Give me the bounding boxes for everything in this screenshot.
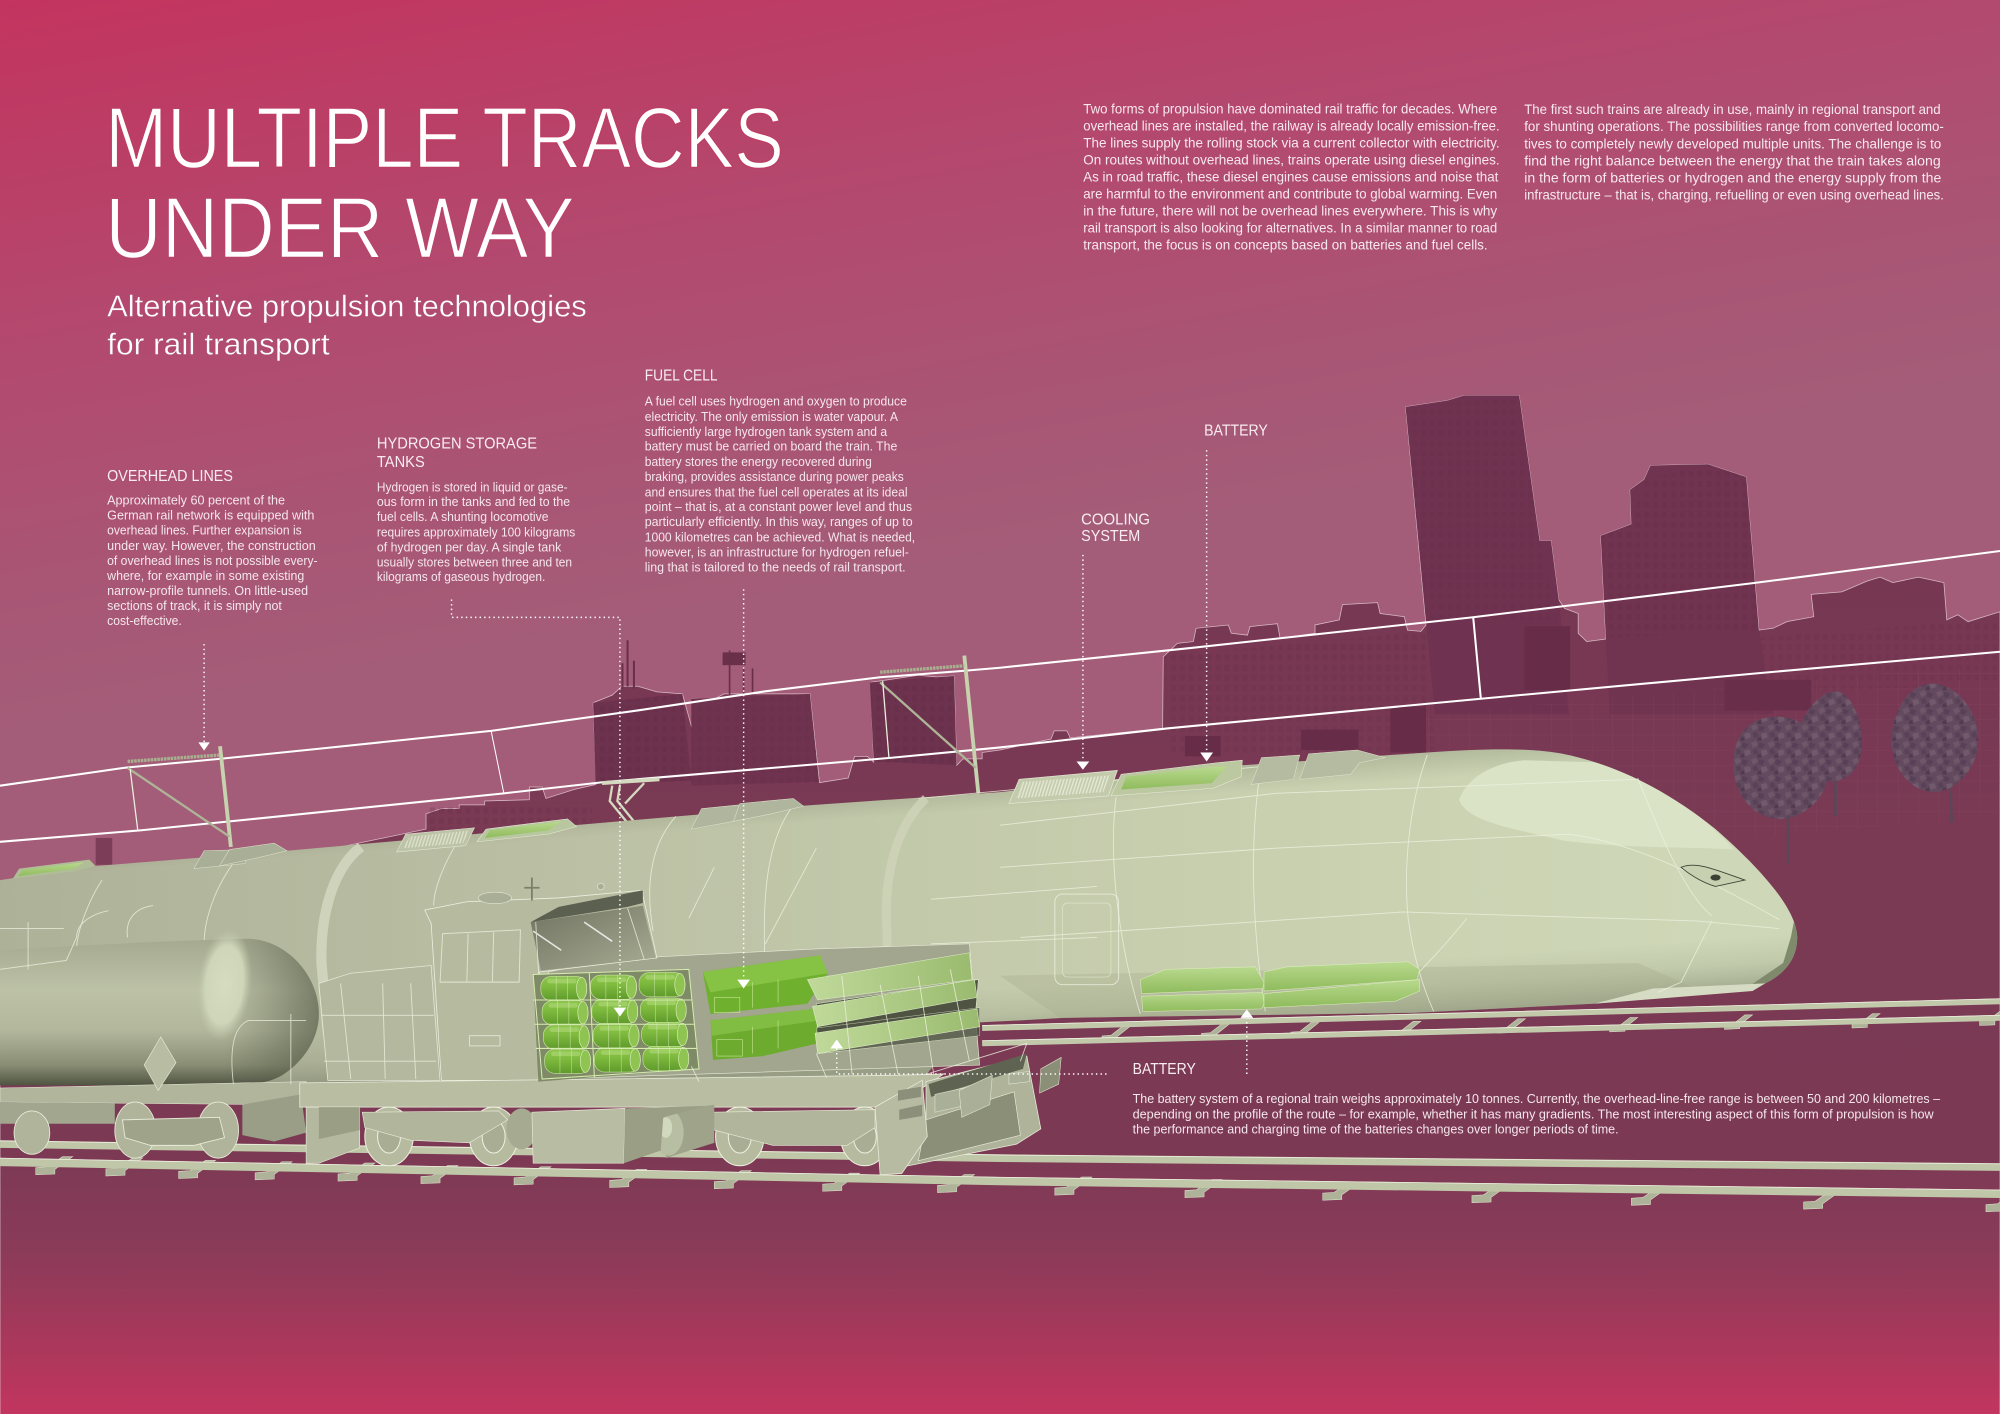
locomotive [300, 878, 1061, 1175]
fuel cell [703, 955, 828, 1060]
panel: battery: depending on the profile of the route – for example, whether it has many gradients. The most interesting aspect of this form of propulsion is how [1133, 1107, 1934, 1122]
panel: fuel cell: particularly efficiently. In this way, ranges of up to [645, 514, 913, 529]
tower windows [426, 395, 2000, 842]
roof: battery front [1111, 760, 1242, 796]
locomotive front railing [691, 969, 1027, 1082]
rooftop antennas [622, 640, 753, 695]
intro text column 1: are harmful to the environment and contribute to global warming. Even [1083, 186, 1497, 202]
roof: third unit [13, 843, 287, 879]
lower track [0, 1141, 2000, 1212]
title: MULTIPLE TRACKS [105, 90, 784, 187]
label: cooling system [1081, 511, 1150, 545]
intro text column 2: in the form of batteries or hydrogen and the energy supply from the [1524, 170, 1941, 186]
label: cooling system: COOLING [1081, 511, 1150, 529]
panel: fuel cell: battery must be carried on board the train. The [645, 439, 897, 454]
intro text column 1: On routes without overhead lines, trains operate using diesel engines. [1083, 152, 1500, 168]
panel: overhead lines: overhead lines. Further expansion is [107, 523, 302, 538]
trees [1733, 684, 1978, 864]
pantograph [602, 779, 659, 821]
central box [532, 1108, 625, 1163]
roof fittings [478, 878, 604, 904]
catenary mast right [880, 656, 978, 793]
panel: fuel cell: electricity. The only emission is water vapour. A [645, 409, 898, 424]
panel: fuel cell: A fuel cell uses hydrogen and oxygen to produce [645, 394, 907, 409]
panel: overhead lines: under way. However, the construction [107, 538, 316, 553]
engine hood behind equipment [548, 944, 980, 1079]
panel: overhead lines: Approximately 60 percent of the [107, 493, 285, 508]
panel: fuel cell: ling that is tailored to the needs of rail transport. [645, 560, 906, 575]
panel: hydrogen storage tanks: TANKS [377, 453, 425, 471]
subtitle [107, 289, 587, 362]
wagon wheels [14, 1102, 239, 1158]
panel: overhead lines: OVERHEAD LINES [107, 467, 233, 485]
intro text column 1: in the future, there will not be overhead lines everywhere. This is why [1083, 204, 1498, 220]
leader: overhead lines [198, 644, 210, 751]
panel: battery: the performance and charging time of the batteries changes over longer periods of time. [1133, 1122, 1619, 1137]
intro text column 2: infrastructure – that is, charging, refuelling or even using overhead lines. [1524, 187, 1944, 203]
catenary mast left [128, 746, 231, 847]
title [105, 90, 784, 277]
nose lip [1594, 983, 1765, 1004]
panel: overhead lines: narrow-profile tunnels. On little-used [107, 583, 308, 598]
bogie frames [362, 1110, 875, 1145]
subtitle: Alternative propulsion technologies [107, 289, 587, 323]
panel: fuel cell: however, is an infrastructure for hydrogen refuel- [645, 544, 909, 559]
panel: overhead lines: cost-effective. [107, 613, 182, 628]
panel: hydrogen storage tanks: ous form in the tanks and fed to the [377, 494, 570, 509]
tank frame [0, 1082, 306, 1105]
panel: fuel cell: and ensures that the fuel cell operates at its ideal [645, 484, 908, 499]
front buffer end [902, 1056, 1041, 1167]
door [1055, 894, 1119, 985]
panel: overhead lines: sections of track, it is simply not [107, 598, 282, 613]
panel: fuel cell: braking, provides assistance during power peaks [645, 469, 904, 484]
deck [300, 1074, 944, 1107]
leader: cooling system [1077, 555, 1089, 770]
panel: hydrogen storage tanks: Hydrogen is stored in liquid or gase- [377, 479, 568, 494]
intro text column 1: As in road traffic, these diesel engines cause emissions and noise that [1083, 169, 1498, 185]
city skyline and ground [0, 395, 2000, 1414]
label: battery: BATTERY [1204, 422, 1268, 440]
roof: pads front [1251, 750, 1385, 784]
panel: battery [1133, 1060, 1941, 1137]
intro text column 1: transport, the focus is on concepts based on batteries and fuel cells. [1083, 238, 1488, 254]
panel: hydrogen storage tanks: fuel cells. A shunting locomotive [377, 509, 548, 524]
underfloor tanks [506, 1105, 714, 1158]
panel: overhead lines: German rail network is equipped with [107, 508, 314, 523]
tank wagon [0, 906, 319, 1158]
train lines [77, 755, 1779, 1014]
hazard plate [144, 1037, 176, 1091]
cab [425, 890, 657, 1080]
intro text column 2 [1524, 102, 1944, 203]
panel: fuel cell: FUEL CELL [645, 367, 718, 385]
buffer [935, 1057, 1061, 1117]
leader: fuel cell [737, 589, 750, 988]
leader: locomotive battery [830, 1040, 1108, 1074]
intro text column 2: The first such trains are already in use, mainly in regional transport and [1524, 102, 1941, 118]
catenary wires [0, 551, 2000, 842]
intro text column 2: tives to completely newly developed multiple units. The challenge is to [1524, 136, 1941, 152]
band rings [321, 847, 361, 1033]
passenger train body [0, 749, 1798, 1082]
left column [306, 1107, 360, 1163]
underfloor batteries [1140, 962, 1420, 1011]
cab roof dark [531, 890, 643, 922]
locomotive batteries [807, 953, 980, 1054]
title: UNDER WAY [105, 180, 575, 277]
panel: fuel cell: 1000 kilometres can be achieved. What is needed, [645, 529, 915, 544]
panel: battery: The battery system of a regional train weighs approximately 10 tonnes. Currently, the overhead-line-free range is between 50 and 200 kilometres – [1133, 1091, 1941, 1106]
panel: fuel cell: sufficiently large hydrogen tank system and a [645, 424, 888, 439]
roof: cooling and battery second unit [397, 798, 804, 852]
panel: fuel cell [645, 367, 915, 575]
intro text column 2: find the right balance between the energy that the train takes along [1524, 153, 1941, 169]
panel: fuel cell: battery stores the energy recovered during [645, 454, 872, 469]
label: cooling system: SYSTEM [1081, 527, 1140, 545]
intro text column 1: overhead lines are installed, the railway is already locally emission-free. [1083, 118, 1500, 134]
panel: hydrogen storage tanks: of hydrogen per day. A single tank [377, 539, 562, 554]
subtitle: for rail transport [107, 328, 330, 362]
panel: hydrogen storage tanks: HYDROGEN STORAGE [377, 434, 537, 452]
leader: underfloor battery [1240, 1010, 1253, 1074]
cab lines [440, 908, 644, 1080]
small distant block [96, 838, 112, 865]
leader: battery roof [1200, 450, 1213, 761]
intro text column 1: rail transport is also looking for alternatives. In a similar manner to road [1083, 221, 1497, 237]
headlight [1681, 865, 1745, 886]
panel: hydrogen storage tanks: requires approximately 100 kilograms [377, 524, 576, 539]
rear hood [319, 966, 440, 1080]
right column [875, 1080, 927, 1175]
nose highlight [1459, 760, 1735, 849]
intro text column 1: Two forms of propulsion have dominated rail traffic for decades. Where [1083, 101, 1497, 117]
panel: overhead lines: where, for example in some existing [106, 568, 304, 583]
panel: overhead lines: of overhead lines is not possible every- [107, 553, 318, 568]
leader: hydrogen storage tanks [452, 599, 626, 1017]
panel: overhead lines [106, 467, 318, 628]
panel: fuel cell: point – that is, at a constant power level and thus [645, 499, 912, 514]
tank highlight [192, 926, 257, 1043]
dome railing [0, 906, 306, 1084]
panel: hydrogen storage tanks [377, 434, 576, 584]
hydrogen tanks [533, 969, 699, 1082]
intro text column 1: The lines supply the rolling stock via a current collector with electricity. [1083, 135, 1500, 151]
front track [982, 999, 2000, 1043]
panel: hydrogen storage tanks: kilograms of gaseous hydrogen. [377, 569, 545, 584]
intro text column 1 [1083, 101, 1500, 254]
intro text column 2: for shunting operations. The possibilities range from converted locomo- [1524, 119, 1944, 135]
bogie wheels [365, 1107, 889, 1166]
panel: hydrogen storage tanks: usually stores between three and ten [377, 554, 572, 569]
cab window recess [531, 906, 656, 971]
panel: battery: BATTERY [1133, 1060, 1196, 1078]
roof: cooling system front [1009, 770, 1117, 804]
